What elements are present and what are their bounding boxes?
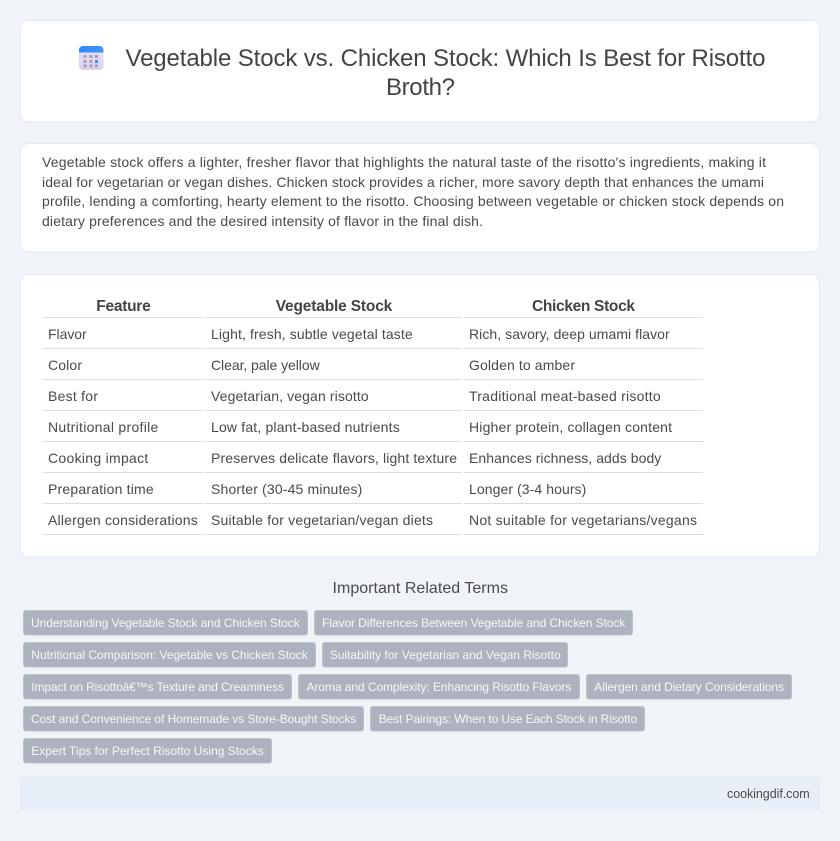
row: preparation time: Longer (3-4 hours) (469, 481, 586, 497)
tag (24, 610, 308, 635)
row: nutritional profile: Higher protein, collagen content (469, 419, 672, 435)
row: preparation time: Preparation time (48, 481, 154, 497)
tag (24, 674, 292, 699)
intro paragraph: profile, lending a comforting, hearty element to the risotto. Choosing between vegetable or chicken stock depends on (42, 193, 784, 209)
row: flavor: Flavor (48, 326, 87, 342)
row: preparation time (48, 481, 586, 497)
tag: Cost and Convenience of Homemade vs Store-Bought Stocks (31, 712, 356, 726)
comparison table panel (20, 274, 820, 557)
tag (586, 674, 792, 699)
row: nutritional profile (48, 419, 672, 435)
row: color: Golden to amber (469, 357, 575, 373)
intro paragraph: Vegetable stock offers a lighter, fresher flavor that highlights the natural taste of the risotto's ingredients, making it (42, 154, 766, 170)
related terms tags (24, 610, 792, 763)
footer bar (20, 777, 820, 811)
footer source: cookingdif.com (727, 787, 810, 801)
intro paragraph (42, 154, 784, 229)
row: flavor (48, 326, 670, 342)
table header row (96, 298, 635, 315)
tag (298, 674, 580, 699)
tag (370, 706, 644, 731)
tag: Best Pairings: When to Use Each Stock in Risotto (379, 712, 638, 726)
intro text panel (20, 144, 820, 252)
icon: calendar (79, 46, 104, 70)
title: Vegetable Stock vs. Chicken Stock: Which Is Best for Risotto (126, 45, 766, 72)
row: nutritional profile: Low fat, plant-based nutrients (211, 419, 400, 435)
row: allergen considerations: Not suitable for vegetarians/vegans (469, 512, 697, 528)
row: color: Color (48, 357, 82, 373)
row: nutritional profile: Nutritional profile (48, 419, 159, 435)
row: cooking impact: Enhances richness, adds body (469, 450, 661, 466)
tag (24, 642, 316, 667)
tag (24, 738, 272, 763)
tag: Impact on Risottoâ€™s Texture and Creaminess (31, 680, 284, 694)
tag: Aroma and Complexity: Enhancing Risotto Flavors (306, 680, 571, 694)
tag: Flavor Differences Between Vegetable and Chicken Stock (322, 616, 626, 630)
row: cooking impact: Preserves delicate flavors, light texture (211, 450, 457, 466)
table header row: Chicken Stock (532, 298, 635, 315)
row: flavor: Rich, savory, deep umami flavor (469, 326, 670, 342)
related terms heading: Important Related Terms (332, 580, 508, 597)
comparison table (43, 298, 703, 535)
tag: Expert Tips for Perfect Risotto Using Stocks (31, 744, 264, 758)
tag: Understanding Vegetable Stock and Chicken Stock (31, 616, 301, 630)
row: color: Clear, pale yellow (211, 357, 321, 373)
row: allergen considerations (48, 512, 697, 528)
row: best for: Best for (48, 388, 98, 404)
row: flavor: Light, fresh, subtle vegetal taste (211, 326, 413, 342)
header card (20, 20, 820, 122)
row: color (48, 357, 575, 373)
intro paragraph: dietary preferences and the desired intensity of flavor in the final dish. (42, 213, 483, 229)
row: allergen considerations: Allergen considerations (48, 512, 198, 528)
tag (314, 610, 632, 635)
tag: Suitability for Vegetarian and Vegan Risotto (330, 648, 561, 662)
tag (24, 706, 364, 731)
table header row: Vegetable Stock (276, 298, 393, 315)
row: cooking impact (48, 450, 661, 466)
row: best for: Traditional meat-based risotto (469, 388, 661, 404)
title (126, 45, 766, 101)
row: best for: Vegetarian, vegan risotto (211, 388, 369, 404)
tag: Nutritional Comparison: Vegetable vs Chicken Stock (31, 648, 309, 662)
row: cooking impact: Cooking impact (48, 450, 148, 466)
table header row: Feature (96, 298, 151, 315)
title: Broth? (386, 74, 455, 101)
tag (322, 642, 568, 667)
row: allergen considerations: Suitable for vegetarian/vegan diets (211, 512, 433, 528)
row: best for (48, 388, 661, 404)
row: preparation time: Shorter (30-45 minutes) (211, 481, 362, 497)
intro paragraph: ideal for vegetarian or vegan dishes. Chicken stock provides a richer, more savory depth that enhances the umami (42, 174, 764, 190)
tag: Allergen and Dietary Considerations (594, 680, 784, 694)
